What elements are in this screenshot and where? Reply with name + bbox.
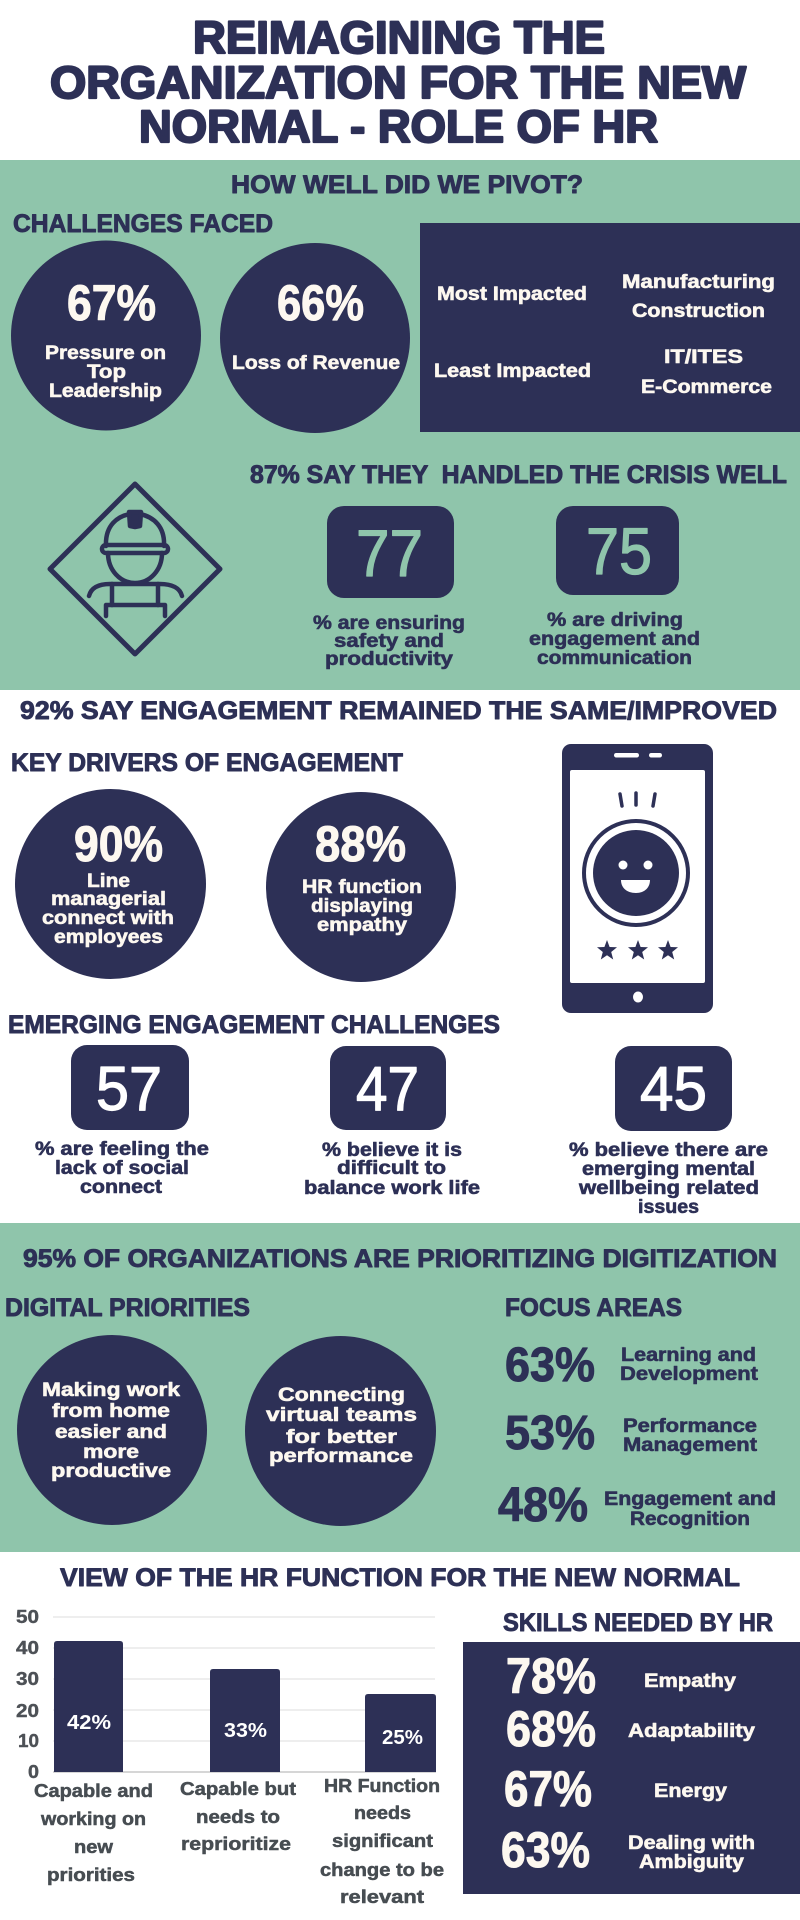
circle: connecting virtual teams: virtual teams xyxy=(266,1405,417,1426)
category label: needs significant change: change to be xyxy=(320,1860,444,1880)
heading: skills needed by hr: SKILLS NEEDED BY HR xyxy=(503,1609,773,1637)
heading: emerging engagement challenges: EMERGING ENGAGEMENT CHALLENGES xyxy=(8,1011,500,1039)
text: difficult to balance work life: % believe it is xyxy=(322,1140,462,1161)
title: ORGANIZATION FOR THE NEW xyxy=(50,57,747,108)
panel: most and least impacted: Construction xyxy=(632,301,765,322)
stat circle: 90 percent: 90% xyxy=(74,816,163,872)
focus area: performance management xyxy=(505,1407,758,1460)
panel: most and least impacted: IT/ITES xyxy=(664,347,743,368)
category label: capable but reprioritize: Capable but xyxy=(180,1779,296,1799)
skill: energy: Energy xyxy=(654,1781,727,1802)
skill: adaptability: 68% xyxy=(506,1701,596,1757)
stat circle: 67 percent xyxy=(11,240,201,430)
heading: engagement remained the same: 92% SAY ENGAGEMENT REMAINED THE SAME/IMPROVED xyxy=(20,697,777,725)
heading: digital priorities: DIGITAL PRIORITIES xyxy=(5,1294,250,1322)
icon: phone with smiley and stars xyxy=(562,744,713,1013)
stat circle: 88 percent: 88% xyxy=(315,816,406,872)
stat circle: 88 percent: empathy xyxy=(317,915,407,936)
text: emerging mental wellbeing issues xyxy=(569,1140,768,1218)
category label: capable and working xyxy=(34,1781,153,1885)
stat box: 47: 47 xyxy=(356,1055,419,1124)
y axis labels: 50 xyxy=(16,1607,39,1627)
stat circle: 90 percent: connect with xyxy=(42,908,174,929)
circle: connecting virtual teams xyxy=(245,1336,436,1526)
circle: connecting virtual teams: performance xyxy=(269,1446,413,1467)
title: REIMAGINING THE xyxy=(193,12,605,63)
skill: empathy: 78% xyxy=(506,1648,596,1704)
stat circle: 67 percent: 67% xyxy=(67,275,156,331)
panel: skills needed xyxy=(463,1642,800,1894)
icon: worker in diamond xyxy=(50,484,220,654)
focus area: learning and development: Learning and xyxy=(621,1345,756,1366)
stat box: 45: 45 xyxy=(640,1055,707,1124)
y axis labels: 0 xyxy=(28,1762,39,1782)
skill: empathy: Empathy xyxy=(644,1671,736,1692)
focus area: learning and development: 63% xyxy=(505,1339,595,1392)
text: difficult to balance work life: difficult to xyxy=(337,1158,446,1179)
stat circle: 66 percent: 66% xyxy=(277,275,364,331)
bar: 42 percent: 42% xyxy=(67,1712,111,1734)
stat circle: 66 percent: Loss of Revenue xyxy=(232,353,400,374)
y axis labels: 30 xyxy=(16,1669,39,1689)
text: emerging mental wellbeing issues: issues xyxy=(638,1197,699,1218)
text: driving engagement and communication: engagement and xyxy=(529,629,700,650)
category label: capable and working: priorities xyxy=(47,1865,135,1885)
skill: adaptability xyxy=(506,1701,756,1757)
focus area: learning and development: Development xyxy=(620,1364,759,1385)
stat circle: 66 percent xyxy=(220,243,410,433)
skill: dealing with ambiguity: Ambiguity xyxy=(639,1852,744,1873)
stat box: 75 xyxy=(556,506,679,595)
text: emerging mental wellbeing issues: % believe there are xyxy=(569,1140,768,1161)
circle: connecting virtual teams: Connecting xyxy=(278,1385,405,1406)
circle: connecting virtual teams: for better xyxy=(286,1427,398,1448)
skill: energy: 67% xyxy=(504,1761,592,1817)
stat circle: 67 percent: Pressure on xyxy=(45,343,166,364)
focus area: learning and development xyxy=(505,1339,759,1392)
heading: how well did we pivot: HOW WELL DID WE PIVOT? xyxy=(231,171,583,199)
title: NORMAL - ROLE OF HR xyxy=(139,101,658,152)
text: emerging mental wellbeing issues: emerging mental xyxy=(582,1159,755,1180)
y axis labels: 40 xyxy=(16,1638,39,1658)
title xyxy=(50,12,747,152)
panel: most and least impacted: E-Commerce xyxy=(641,377,772,398)
stat circle: 67 percent: Leadership xyxy=(49,381,162,402)
category label: capable but reprioritize: needs to xyxy=(196,1807,280,1827)
circle: work from home: easier and xyxy=(55,1422,167,1443)
y axis labels: 20 xyxy=(16,1701,39,1721)
category label: needs significant change: relevant xyxy=(340,1887,424,1907)
heading: key drivers of engagement: KEY DRIVERS OF ENGAGEMENT xyxy=(11,749,403,777)
y axis labels: 10 xyxy=(18,1731,39,1751)
stat box: 57: 57 xyxy=(96,1055,162,1124)
skill: energy xyxy=(504,1761,727,1817)
text: ensuring safety and productivity xyxy=(313,613,465,670)
stat circle: 88 percent xyxy=(266,792,456,982)
text: lack of social connect: % are feeling the xyxy=(35,1139,209,1160)
stat circle: 90 percent: employees xyxy=(54,927,163,948)
stat circle: 90 percent: Line xyxy=(87,871,130,892)
text: lack of social connect: connect xyxy=(80,1177,163,1198)
circle: work from home: from home xyxy=(52,1401,170,1422)
skill: adaptability: Adaptability xyxy=(628,1721,756,1742)
stat circle: 88 percent: displaying xyxy=(311,896,413,917)
text: ensuring safety and productivity: safety and xyxy=(334,631,444,652)
category label: capable and working: Capable and xyxy=(34,1781,153,1801)
stat circle: 88 percent: HR function xyxy=(302,877,422,898)
category label: capable and working: new xyxy=(74,1837,114,1857)
skill: dealing with ambiguity: 63% xyxy=(501,1822,590,1878)
text: ensuring safety and productivity: % are ensuring xyxy=(313,613,465,634)
category label: capable but reprioritize xyxy=(180,1779,296,1854)
text: emerging mental wellbeing issues: wellbeing related xyxy=(578,1178,759,1199)
category label: needs significant change xyxy=(320,1776,444,1907)
text: difficult to balance work life: balance work life xyxy=(304,1178,480,1199)
stat circle: 67 percent: Top xyxy=(87,362,126,383)
circle: work from home: Making work xyxy=(42,1380,181,1401)
y axis labels xyxy=(16,1607,39,1782)
circle: work from home xyxy=(17,1335,207,1525)
panel: most and least impacted: Most Impacted xyxy=(437,284,587,305)
stat circle: 90 percent xyxy=(15,789,206,979)
heading: challenges faced: CHALLENGES FACED xyxy=(13,210,273,238)
circle: work from home: more xyxy=(83,1442,139,1463)
category label: needs significant change: HR Function xyxy=(324,1776,440,1796)
stat box: 75: 75 xyxy=(586,514,652,588)
stat box: 47 xyxy=(330,1046,446,1130)
text: lack of social connect: lack of social xyxy=(55,1158,189,1179)
text: ensuring safety and productivity: productivity xyxy=(325,649,454,670)
stat box: 57 xyxy=(71,1045,189,1130)
focus area: performance management: Performance xyxy=(623,1416,757,1437)
panel: how well did we pivot xyxy=(0,160,800,690)
bar: 25 percent xyxy=(365,1694,436,1772)
bar: 33 percent xyxy=(210,1669,280,1772)
panel: most and least impacted: Manufacturing xyxy=(622,272,775,293)
heading: view of the hr function: VIEW OF THE HR FUNCTION FOR THE NEW NORMAL xyxy=(60,1564,740,1592)
text: driving engagement and communication: communication xyxy=(537,648,692,669)
bar: 33 percent: 33% xyxy=(224,1720,267,1742)
panel: most and least impacted xyxy=(420,223,800,432)
focus area: performance management: 53% xyxy=(505,1407,595,1460)
stat box: 77 xyxy=(327,506,454,598)
panel: prioritizing digitization xyxy=(0,1223,800,1552)
text: lack of social connect xyxy=(35,1139,209,1198)
bar: 42 percent xyxy=(54,1641,123,1772)
circle: work from home: productive xyxy=(51,1461,171,1482)
skill: dealing with ambiguity: Dealing with xyxy=(628,1833,755,1854)
focus area: performance management: Management xyxy=(623,1435,758,1456)
text: driving engagement and communication xyxy=(529,610,700,669)
focus area: engagement and recognition: 48% xyxy=(498,1479,588,1532)
skill: dealing with ambiguity xyxy=(501,1822,755,1878)
category label: capable and working: working on xyxy=(40,1809,146,1829)
category label: needs significant change: needs xyxy=(354,1803,411,1823)
focus area: engagement and recognition: Engagement and xyxy=(604,1489,776,1510)
text: difficult to balance work life xyxy=(304,1140,480,1199)
panel: most and least impacted: Least Impacted xyxy=(434,361,591,382)
bar chart: view of hr function xyxy=(16,1607,444,1907)
text: driving engagement and communication: % are driving xyxy=(547,610,683,631)
bar: 25 percent: 25% xyxy=(382,1727,423,1749)
focus area: engagement and recognition xyxy=(498,1479,776,1532)
stat circle: 90 percent: managerial xyxy=(51,889,166,910)
heading: organizations prioritizing digitization: 95% OF ORGANIZATIONS ARE PRIORITIZING DIGITIZATION xyxy=(23,1245,777,1273)
heading: focus areas: FOCUS AREAS xyxy=(505,1294,682,1322)
focus area: engagement and recognition: Recognition xyxy=(630,1509,750,1530)
category label: needs significant change: significant xyxy=(332,1831,433,1851)
heading: handled the crisis well: 87% SAY THEY HANDLED THE CRISIS WELL xyxy=(250,461,787,489)
category label: capable but reprioritize: reprioritize xyxy=(181,1834,291,1854)
stat box: 45 xyxy=(615,1046,732,1131)
stat box: 77: 77 xyxy=(356,516,423,590)
skill: empathy xyxy=(506,1648,736,1704)
